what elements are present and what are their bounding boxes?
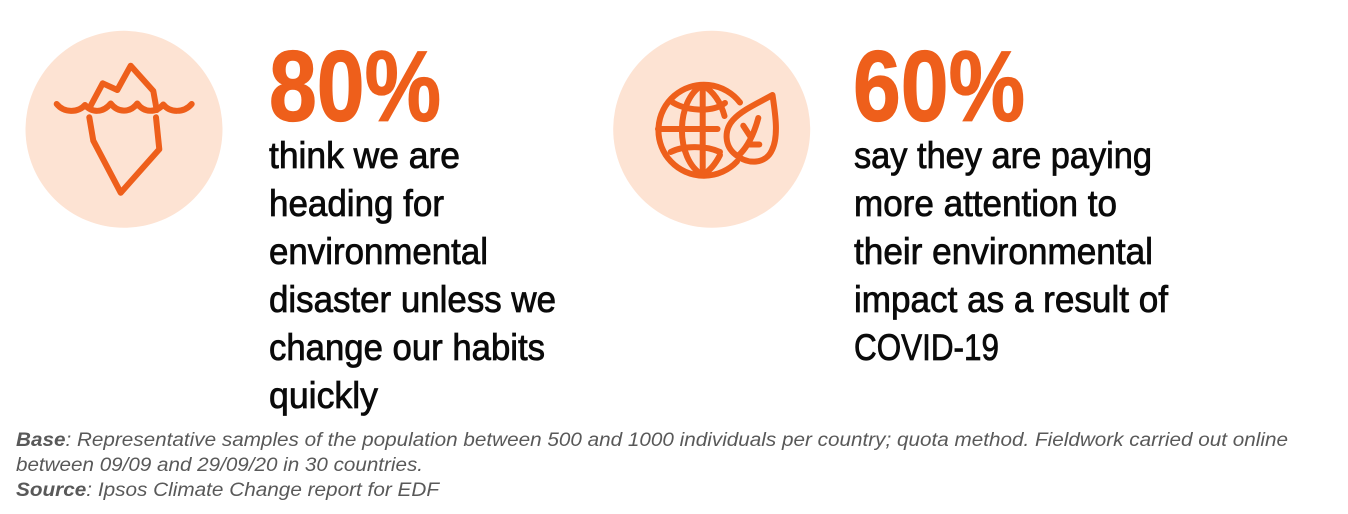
text block: 80% description: disaster unless we <box>269 278 556 320</box>
text block: 60% description <box>854 134 1169 368</box>
text block: base and source footnote: Base: Representative samples of the population between 500 and 1000 individuals per country; quota method. Fieldwork carried out online <box>16 429 1288 451</box>
text block: 60% description: COVID-19 <box>854 326 999 368</box>
text block: 80% description <box>269 134 556 416</box>
icon: globe and leaf in circle <box>613 31 810 228</box>
text block: 60% description: their environmental <box>854 230 1153 272</box>
text block: 60% description: say they are paying <box>854 134 1152 176</box>
text block: base and source footnote: between 09/09 and 29/09/20 in 30 countries. <box>16 454 423 476</box>
heading: 80%: 80% <box>269 30 441 142</box>
text block: 60% description: more attention to <box>854 182 1117 224</box>
text block: 80% description: quickly <box>269 374 378 416</box>
panel: 80% statistic <box>26 30 556 416</box>
text block: 80% description: think we are <box>269 134 460 176</box>
icon: iceberg in circle <box>26 31 222 228</box>
panel: 60% statistic <box>613 30 1169 368</box>
text block: 80% description: change our habits <box>269 326 545 368</box>
heading: 60%: 60% <box>853 30 1025 142</box>
text block: 80% description: heading for <box>269 182 444 224</box>
text block: base and source footnote <box>16 429 1288 501</box>
text block: 80% description: environmental <box>269 230 488 272</box>
text block: 60% description: impact as a result of <box>854 278 1169 320</box>
text block: base and source footnote: Source: Ipsos Climate Change report for EDF <box>16 479 440 501</box>
